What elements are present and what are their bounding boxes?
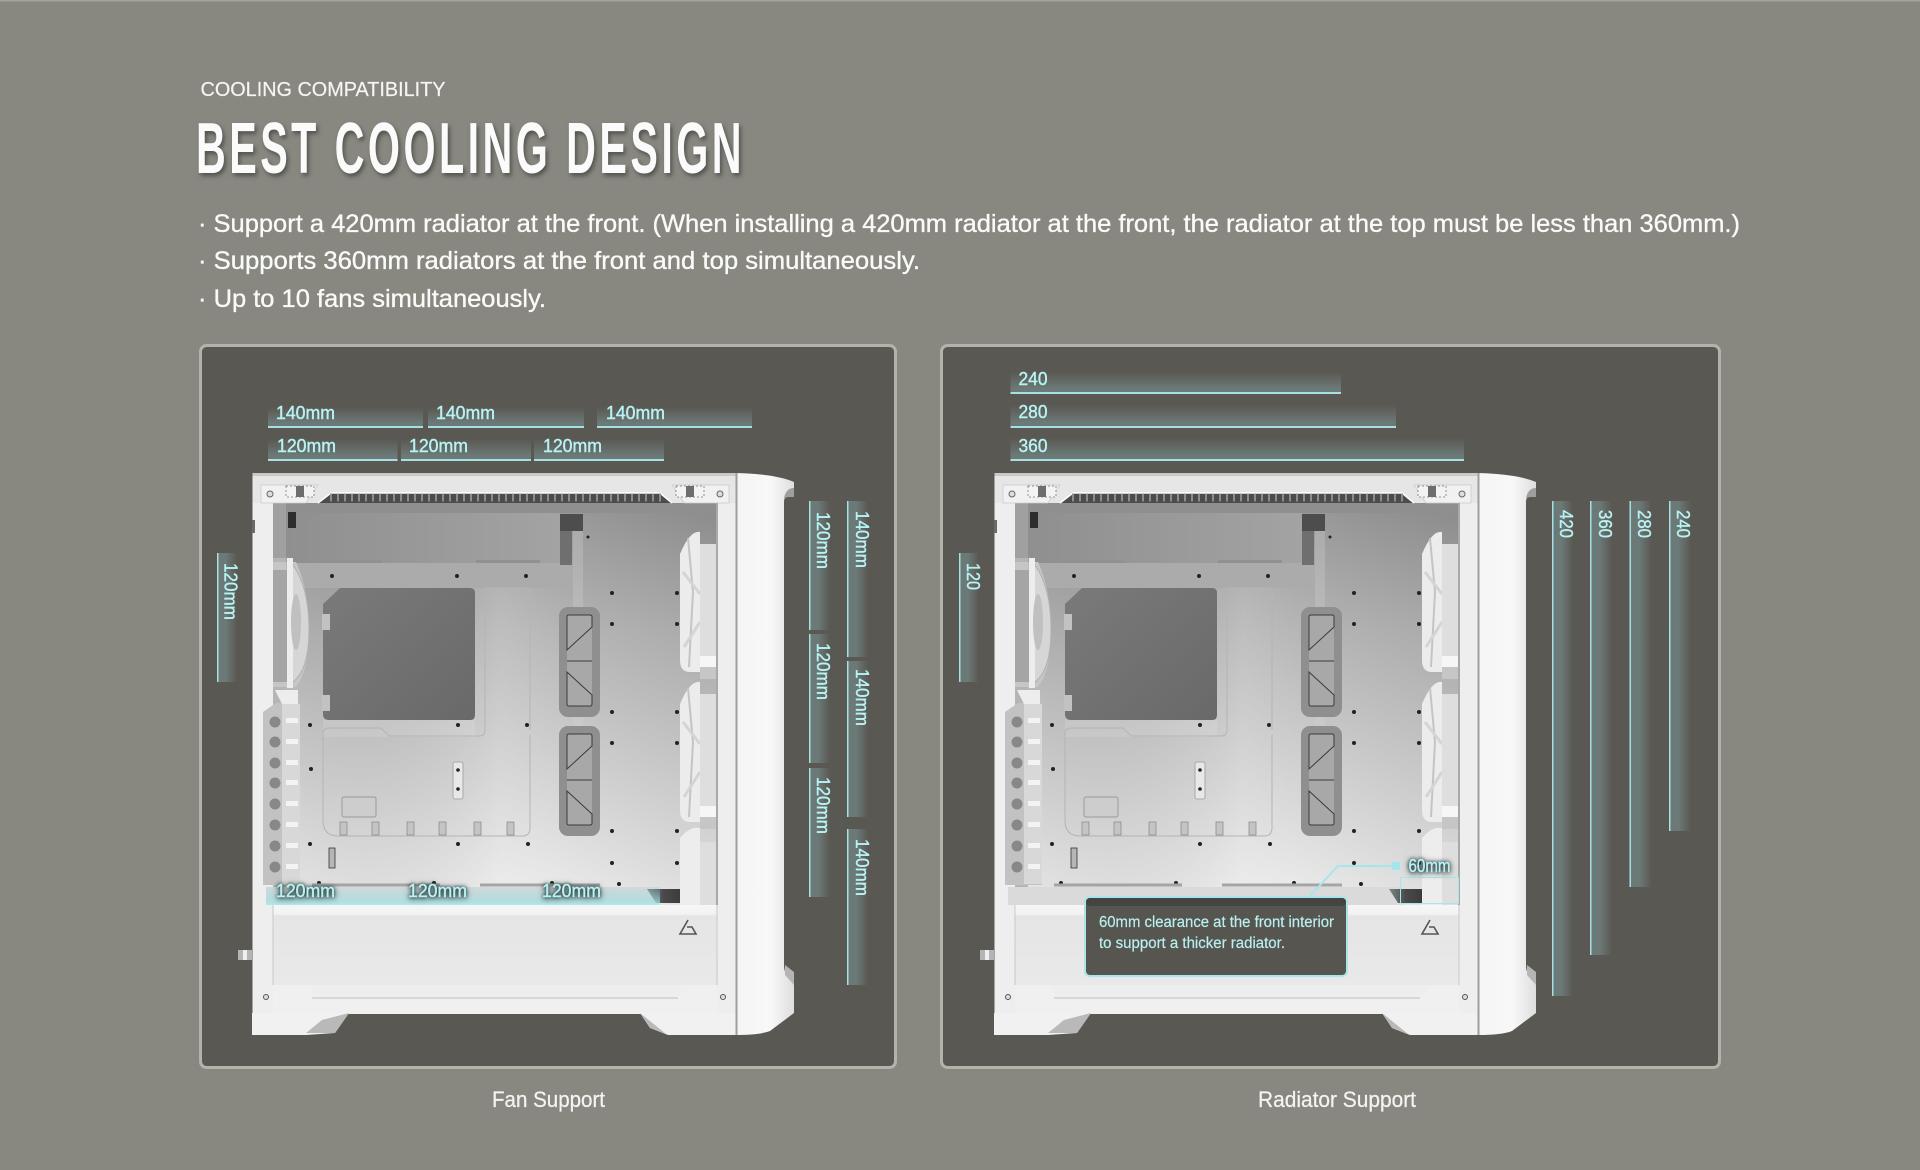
top fan bars 120mm: 120mm: [277, 436, 336, 456]
top fan bars 140mm: 140mm: [276, 403, 335, 423]
front fan bars 140mm: 140mm: [852, 839, 872, 896]
front radiator bars: 420: [1556, 510, 1576, 538]
caption: fan support: Fan Support: [492, 1087, 605, 1112]
front fan bars 140mm: 140mm: [852, 511, 872, 568]
case illustration: radiator support: [980, 473, 1536, 1035]
top fan bars 120mm: [268, 436, 664, 461]
bottom fan highlight: [266, 887, 660, 905]
title: BEST COOLING DESIGN: [196, 109, 745, 189]
front radiator bars: 280: [1634, 510, 1654, 538]
front fan bars 120mm: 120mm: [813, 512, 833, 569]
front fan bars 120mm: [809, 501, 833, 897]
top radiator bars: 360: [1018, 436, 1048, 456]
top radiator bars: 240: [1018, 369, 1048, 389]
rear radiator bar: 120: [963, 563, 983, 590]
callout: [1085, 897, 1347, 976]
top fan bars 140mm: 140mm: [436, 403, 495, 423]
top fan bars 140mm: [268, 403, 752, 428]
front fan bars 140mm: [847, 501, 872, 985]
rear fan bar 120mm: 120mm: [220, 563, 240, 620]
caption: radiator support: Radiator Support: [1258, 1087, 1416, 1112]
panel background: [942, 346, 1720, 1068]
front fan bars 120mm: 120mm: [813, 777, 833, 834]
panel background: [200, 346, 896, 1068]
bottom fan labels: 120mm: [542, 881, 601, 901]
bullet list: · Up to 10 fans simultaneously.: [198, 285, 546, 313]
bottom fan labels: [276, 881, 601, 901]
top radiator bars: [1010, 369, 1464, 461]
panel: fan support: [200, 346, 896, 1068]
rear radiator bar: [959, 553, 983, 682]
front radiator bars: 240: [1673, 510, 1693, 538]
front radiator bars: 360: [1595, 510, 1615, 538]
case illustration: fan support: [238, 473, 794, 1035]
bullet list: [198, 210, 1740, 313]
60mm clearance marker: 60mm: [1408, 856, 1450, 876]
front fan bars 140mm: 140mm: [852, 669, 872, 726]
callout: 60mm clearance at the front interior: [1099, 914, 1334, 931]
top fan bars 120mm: 120mm: [409, 436, 468, 456]
eyebrow heading: COOLING COMPATIBILITY: [200, 78, 446, 101]
panel: radiator support: [942, 346, 1720, 1068]
60mm clearance marker: [1310, 856, 1458, 904]
top fan bars 140mm: 140mm: [606, 403, 665, 423]
front fan bars 120mm: 120mm: [813, 643, 833, 700]
bullet list: · Supports 360mm radiators at the front and top simultaneously.: [198, 247, 920, 275]
bottom fan labels: 120mm: [408, 881, 467, 901]
bottom fan labels: 120mm: [276, 881, 335, 901]
top radiator bars: 280: [1018, 402, 1048, 422]
rear fan bar 120mm: [217, 553, 240, 682]
callout: to support a thicker radiator.: [1099, 935, 1285, 952]
bullet list: · Support a 420mm radiator at the front. (When installing a 420mm radiator at the front, the radiator at the top must be less than 360mm.): [198, 210, 1740, 238]
top fan bars 120mm: 120mm: [543, 436, 602, 456]
front radiator bars: [1552, 501, 1693, 996]
